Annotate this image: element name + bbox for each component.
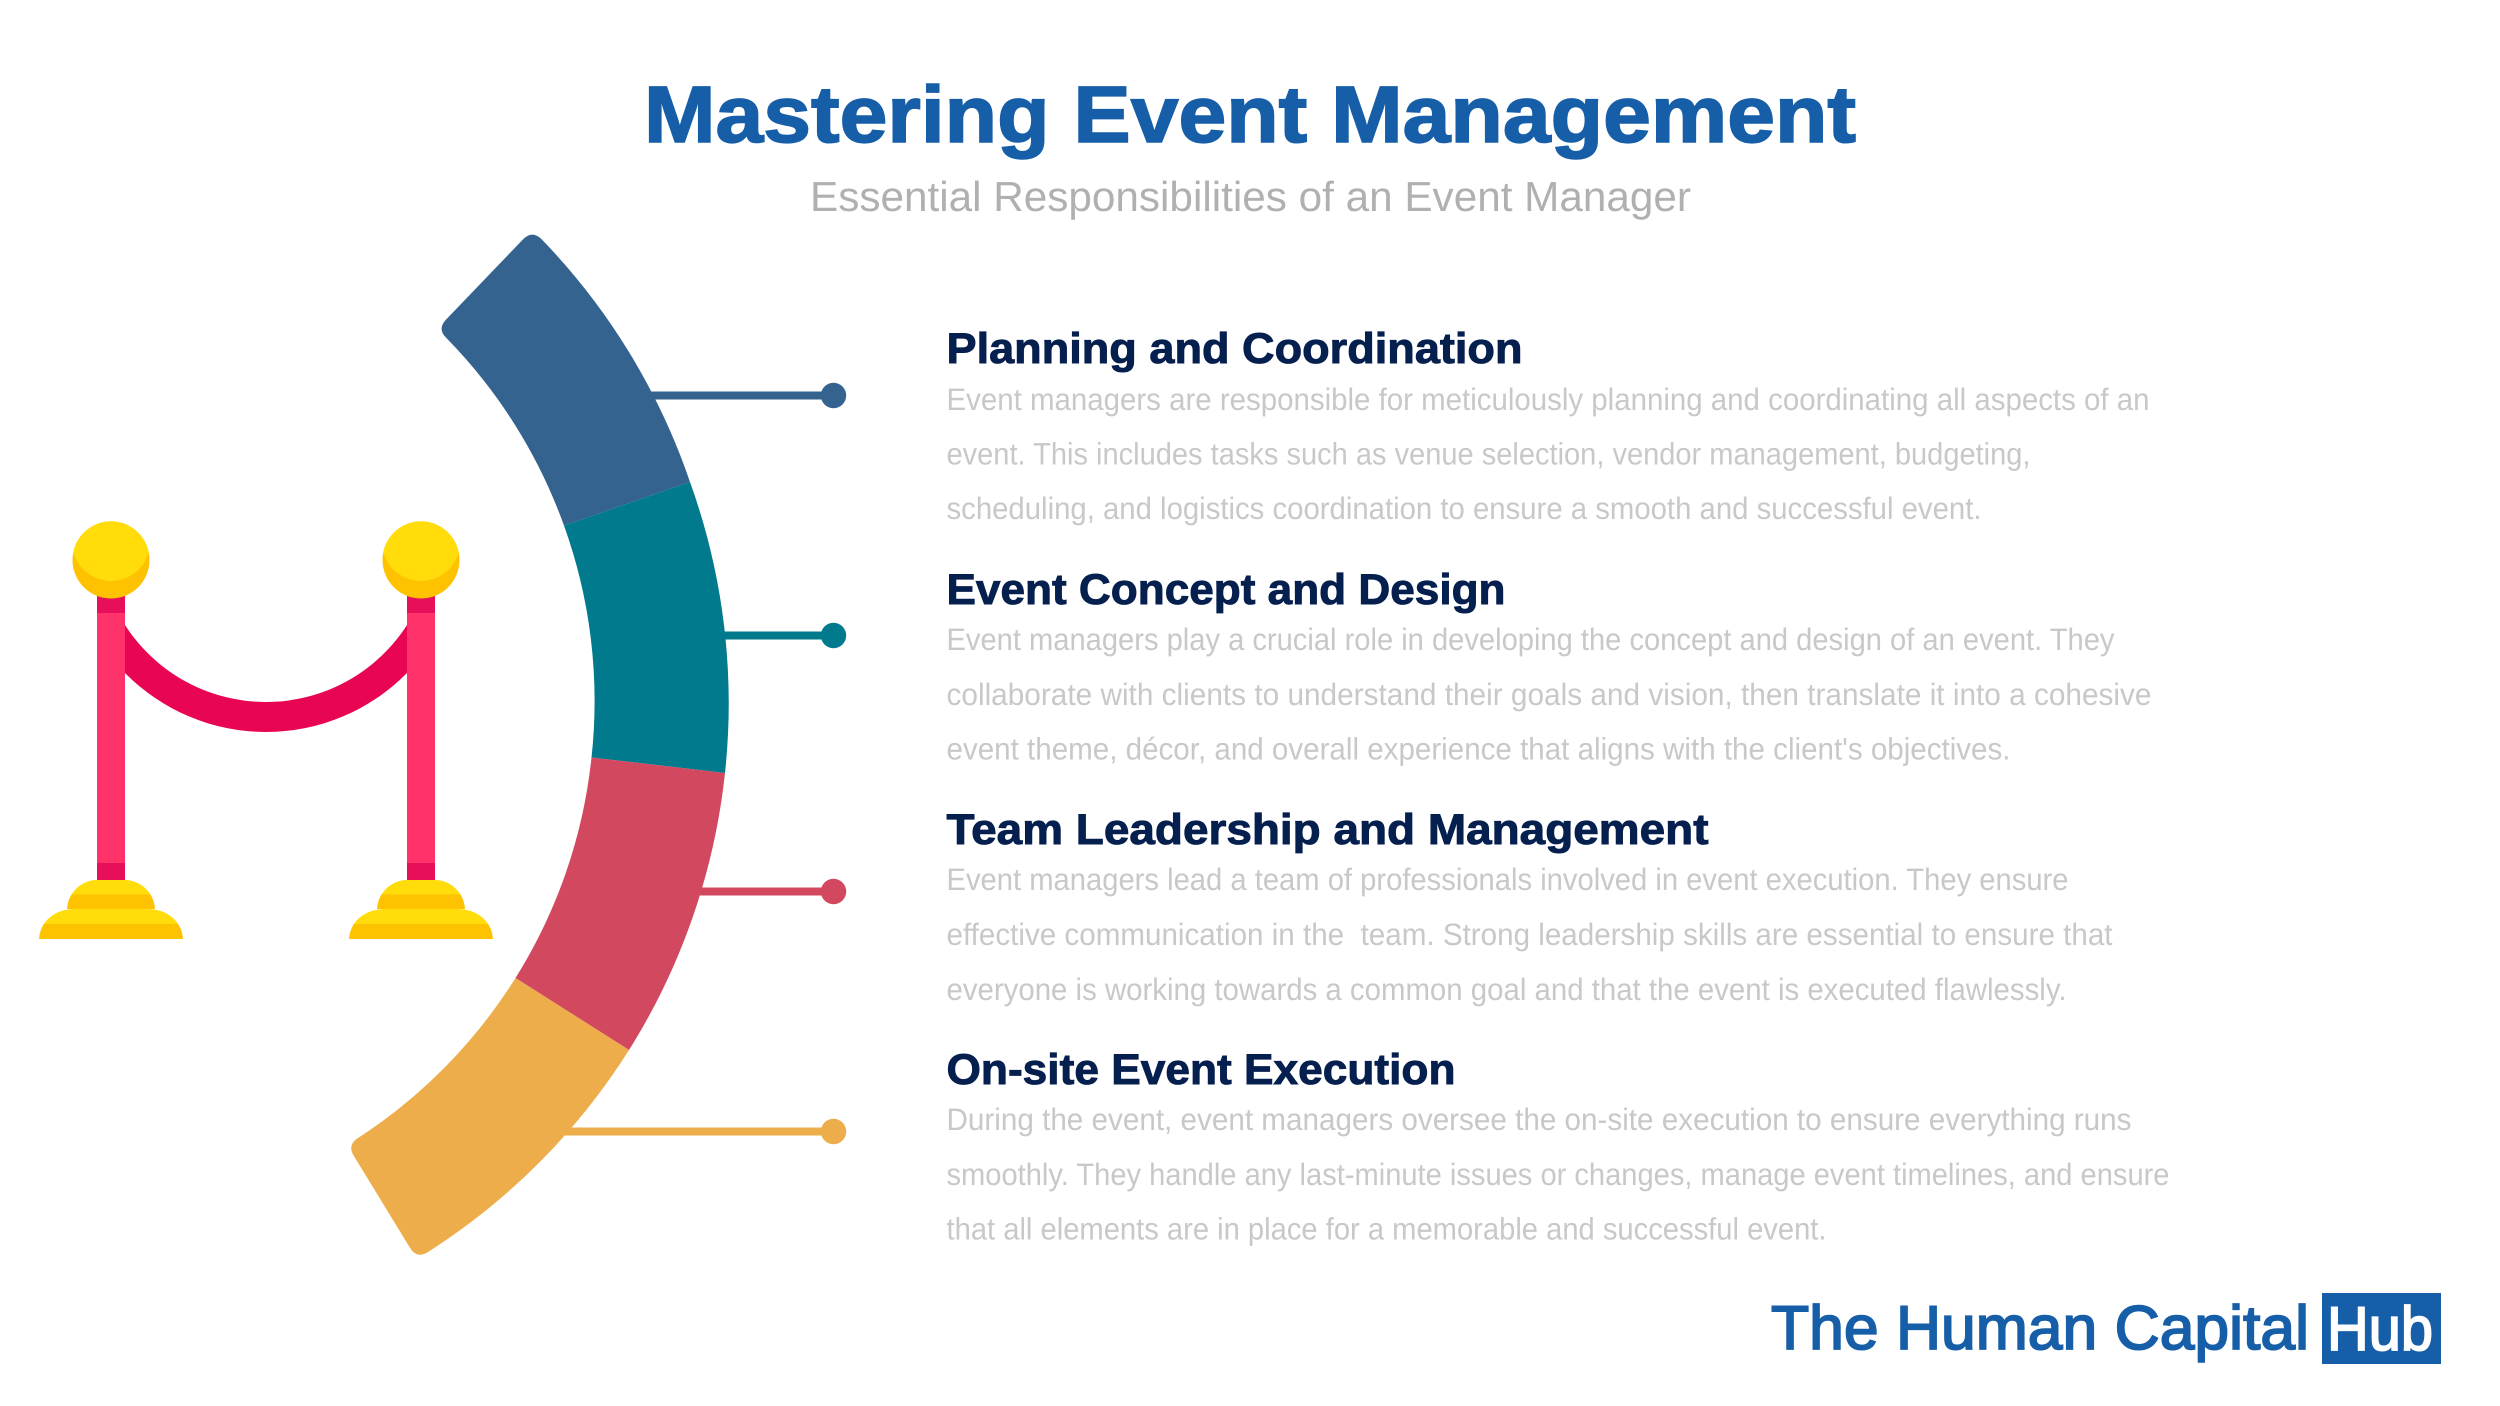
connector: concept [715,623,846,648]
body text [946,382,2150,526]
arc segment: leadership [516,758,725,1050]
heading: On-site Event Execution [946,1046,1456,1094]
connector: planning [640,383,846,408]
arc segment: concept [564,482,729,773]
section: event concept and design [946,566,2152,766]
body text: Event managers lead a team of professionals involved in event execution. They ensure [946,862,2068,897]
body text: scheduling, and logistics coordination to ensure a smooth and successful event. [946,491,1982,526]
heading: Planning and Coordination [946,325,1522,373]
icon: velvet rope stanchions [39,521,493,939]
section: team leadership and management [946,806,2113,1007]
subtitle: Essential Responsibilities of an Event Manager [810,173,1691,220]
left stanchion [39,521,183,939]
right stanchion [349,521,493,939]
body text: smoothly. They handle any last-minute issues or changes, manage event timelines, and ensure [946,1157,2170,1192]
body text: During the event, event managers oversee the on-site execution to ensure everything runs [946,1102,2132,1137]
body text [946,862,2113,1007]
title: Mastering Event Management [644,70,1856,159]
logo: The Human Capital Hub: The Human Capital [1771,1294,2309,1363]
body text: event theme, décor, and overall experience that aligns with the client's objectives. [946,732,2010,766]
body text: everyone is working towards a common goal and that the event is executed flawlessly. [946,972,2066,1007]
body text: Event managers play a crucial role in developing the concept and design of an event. They [946,622,2115,657]
rope [125,625,407,732]
body text: Event managers are responsible for meticulously planning and coordinating all aspects of an [946,382,2150,417]
section: on-site event execution [946,1046,2170,1246]
arc segment: planning [442,235,690,526]
body text: effective communication in the team. Strong leadership skills are essential to ensure that [946,917,2113,952]
connector: leadership [690,879,846,904]
section: planning and coordination [946,325,2150,526]
heading: Team Leadership and Management [946,806,1708,854]
logo: The Human Capital Hub: Hub [2327,1295,2433,1364]
connector: execution [555,1119,846,1144]
body text: collaborate with clients to understand their goals and vision, then translate it into a cohesive [946,677,2152,712]
body text: that all elements are in place for a memorable and successful event. [946,1212,1826,1246]
body text: event. This includes tasks such as venue selection, vendor management, budgeting, [946,436,2030,472]
arc segment: execution [351,978,629,1255]
heading: Event Concept and Design [946,566,1506,614]
body text [946,622,2152,766]
body text [946,1102,2170,1246]
